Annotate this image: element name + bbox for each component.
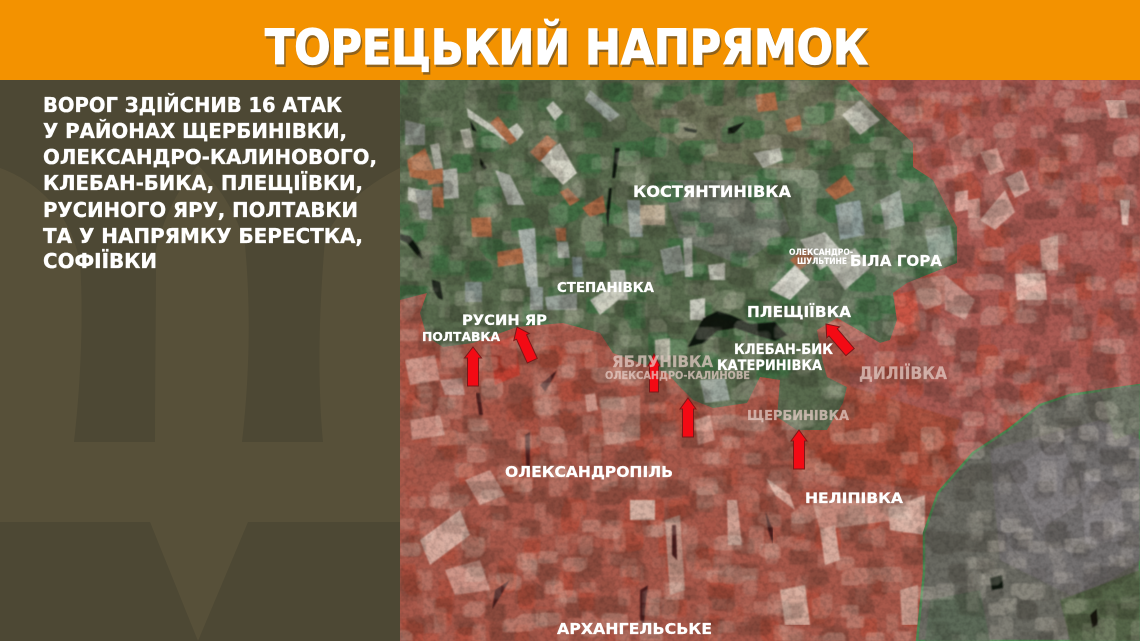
farm fields [400, 90, 955, 403]
map label: Kostiantynivka: КОСТЯНТИНІВКА [633, 182, 792, 201]
enemy-held field patches [405, 100, 1130, 625]
side text: attack summary: ВОРОГ ЗДІЙСНИВ 16 АТАК [43, 92, 342, 117]
side text: attack summary: ОЛЕКСАНДРО-КАЛИНОВОГО, [43, 145, 377, 169]
trident watermark [0, 165, 400, 641]
map label: Katerynivka: КАТЕРИНІВКА [717, 358, 822, 374]
title: ТОРЕЦЬКИЙ НАПРЯМОК [266, 22, 870, 78]
map label: Oleksandro-Shultyne: ШУЛЬТИНЕ [797, 257, 847, 267]
map label: Shcherbynivka: ЩЕРБИНІВКА [747, 408, 850, 424]
arrow: Oleksandro-Kalynove [648, 354, 660, 392]
free territory base [400, 80, 957, 430]
side text: attack summary: ТА У НАПРЯМКУ БЕРЕСТКА, [43, 224, 363, 248]
map label: Dyliivka: ДИЛІЇВКА [859, 364, 947, 383]
dark ravines in occupied area [476, 370, 773, 625]
map label: Kleban-Byk: КЛЕБАН-БИК [734, 342, 833, 358]
side text: attack summary: СОФІЇВКИ [43, 248, 157, 273]
green crop mosaic [400, 80, 960, 380]
map label: Pleshchiivka: ПЛЕЩІЇВКА [747, 302, 851, 321]
side text: attack summary: КЛЕБАН-БИКА, ПЛЕЩІЇВКИ, [43, 170, 363, 195]
side text: attack summary: У РАЙОНАХ ЩЕРБИНІВКИ, [43, 118, 347, 143]
grey city area [917, 385, 1140, 641]
arrow: Poltavka [464, 347, 482, 386]
map label: Yablunivka: ЯБЛУНІВКА [612, 352, 714, 371]
arrow: Rusyn Yar [509, 323, 540, 364]
side text: attack summary [43, 92, 377, 273]
map label: Oleksandro-Kalynove: ОЛЕКСАНДРО-КАЛИНОВЕ [605, 370, 750, 382]
map label: Bila Hora: БІЛА ГОРА [850, 252, 942, 270]
map label: Stepanivka: СТЕПАНІВКА [557, 281, 654, 296]
side text: attack summary: РУСИНОГО ЯРУ, ПОЛТАВКИ [43, 198, 358, 222]
map label: Oleksandro-Shultyne [789, 248, 853, 267]
field mosaic texture: pale parcels [400, 80, 1140, 641]
lake and ravines [400, 120, 787, 347]
map label: Rusyn Yar: РУСИН ЯР [462, 313, 547, 329]
map label: Arkhanhelske: АРХАНГЕЛЬСЬКЕ [557, 620, 712, 638]
arrow: Shcherbynivka [791, 430, 807, 469]
ploughed tan fields [407, 92, 855, 270]
title: ТОРЕЦЬКИЙ НАПРЯМОК [265, 19, 868, 76]
map label: Poltavka: ПОЛТАВКА [422, 329, 500, 344]
texture over the map [400, 80, 1140, 641]
arrow: Katerynivka [680, 398, 696, 437]
arrow: Pleshchiivka [820, 318, 857, 358]
map label: Nelipivka: НЕЛІПІВКА [805, 491, 904, 507]
occupied territory overlay [400, 80, 1140, 641]
map [400, 80, 1140, 641]
field mosaic texture: dark parcels [400, 80, 1140, 641]
saturated red crop mosaic [400, 80, 1140, 641]
field mosaic texture: second pale parcels [400, 80, 1140, 641]
map label: Oleksandropil: ОЛЕКСАНДРОПІЛЬ [505, 463, 673, 481]
map label: Oleksandro-Shultyne: ОЛЕКСАНДРО- [789, 248, 853, 258]
header bar [0, 0, 1140, 80]
left panel [0, 80, 400, 641]
